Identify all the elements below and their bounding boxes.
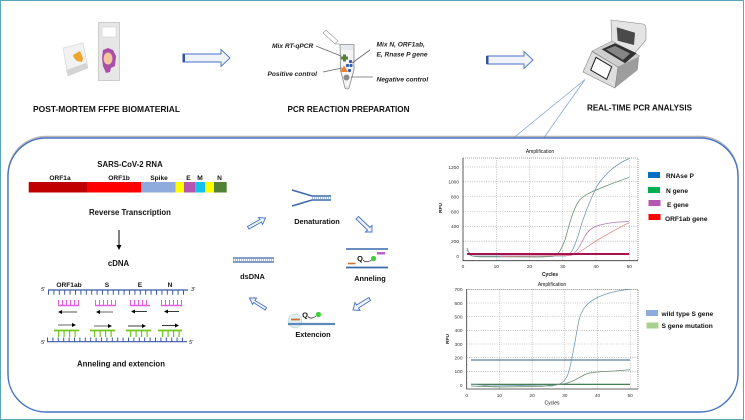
- icon: thermal cycler: [583, 20, 646, 88]
- icon: microscope slide: [98, 22, 120, 80]
- chart title: Amplification: [526, 149, 554, 155]
- dsDNA: dsDNA: [240, 272, 265, 281]
- arrow: reverse transcription to cDNA: [116, 230, 122, 250]
- label: Negative control: [351, 76, 428, 84]
- grid: [463, 158, 638, 261]
- magenta probes: [58, 302, 182, 306]
- label: Positive control: Positive control: [268, 71, 317, 78]
- axis labels: 200: [451, 239, 459, 245]
- icon: reaction tube: [323, 30, 354, 89]
- annealing: [346, 249, 388, 283]
- axis labels: 40: [593, 264, 599, 270]
- legend: four genes: [648, 172, 708, 223]
- axis labels: Cycles: [542, 272, 558, 278]
- axis labels: 0: [460, 383, 463, 389]
- gene labels: [49, 175, 222, 182]
- bottom strand: [47, 340, 187, 342]
- axis labels: 600: [454, 301, 463, 307]
- genome bar: [29, 182, 227, 192]
- axis labels: [438, 165, 632, 278]
- axis labels: 200: [454, 356, 463, 362]
- axis labels: 40: [595, 393, 600, 399]
- arrow: step 1 to step 2: [182, 50, 230, 66]
- denaturation: Denaturation: [294, 217, 340, 226]
- axis labels: 300: [454, 342, 463, 348]
- target labels: ORF1ab: [56, 282, 82, 289]
- target labels: E: [138, 282, 143, 289]
- annealing: Anneling: [354, 274, 386, 283]
- label: Mix N, ORF1ab, E, Rnase P gene: [352, 42, 428, 63]
- heading: PCR reaction preparation: PCR REACTION PREPARATION: [288, 104, 410, 114]
- target labels: 5': [189, 340, 194, 346]
- PCR cycle diagram: [233, 190, 388, 339]
- denaturation: [292, 190, 340, 226]
- axis labels: 600: [451, 210, 459, 216]
- dsDNA: [233, 258, 274, 281]
- axis labels: [445, 287, 633, 406]
- axis labels: RFU: [445, 334, 451, 344]
- axis labels: 30: [560, 264, 566, 270]
- callout lines from cycler to panel: [514, 80, 585, 138]
- green probes: [54, 330, 182, 334]
- arrow: step 2 to step 3: [486, 52, 533, 68]
- top strand: [48, 290, 188, 292]
- legend item: S gene mutation: S gene mutation: [662, 323, 713, 330]
- target labels: N: [168, 282, 173, 289]
- chart title: Amplification: [538, 282, 566, 288]
- panel: detail of RT-qPCR: [8, 136, 738, 412]
- gene labels: M: [197, 175, 203, 182]
- axis labels: 1000: [448, 180, 459, 186]
- axis labels: 10: [497, 393, 502, 399]
- target labels: 5': [41, 287, 46, 293]
- text: Anneling and extencion: Anneling and extencion: [77, 360, 165, 368]
- gene labels: ORF1a: [49, 175, 71, 182]
- legend item: wild type S gene: wild type S gene: [660, 311, 713, 318]
- diagram: annealing and extension: [41, 282, 196, 346]
- arrow: denaturation to annealing: [356, 216, 372, 232]
- axis labels: 400: [454, 328, 463, 334]
- arrow: annealing to extension: [353, 298, 370, 310]
- forward primer arrows: [58, 323, 179, 328]
- gene labels: ORF1b: [108, 175, 130, 182]
- step 2: PCR reaction preparation: [268, 30, 428, 114]
- extension: Extencion: [295, 330, 331, 339]
- heading: post-mortem FFPE biomaterial: POST-MORTEM FFPE BIOMATERIAL: [33, 104, 180, 114]
- annealing: Q: [357, 254, 363, 263]
- gene labels: N: [217, 175, 222, 182]
- axis labels: 800: [451, 194, 459, 200]
- curves: [467, 158, 629, 257]
- target labels: [41, 282, 196, 346]
- axis labels: 20: [529, 393, 535, 399]
- heading: SARS-CoV-2 RNA: SARS-CoV-2 RNA: [97, 160, 163, 169]
- legend item: N gene: N gene: [666, 188, 688, 195]
- extension: [288, 310, 335, 339]
- step 1: post-mortem FFPE biomaterial: [33, 22, 180, 114]
- plot frame: [463, 158, 638, 261]
- chart: amplification, four genes: [438, 149, 638, 278]
- label: Mix N, ORF1ab, E, Rnase P gene: Mix N, ORF1ab,: [376, 42, 425, 48]
- legend: S gene: [646, 310, 713, 330]
- label: Mix RT-qPCR: [272, 43, 341, 56]
- axis labels: 50: [628, 393, 633, 399]
- grid: [467, 289, 638, 389]
- axis labels: 50: [627, 264, 632, 270]
- legend item: ORF1ab gene: ORF1ab gene: [665, 216, 708, 223]
- heading: real-time PCR analysis: REAL-TIME PCR ANALYSIS: [587, 102, 692, 112]
- axis labels: RFU: [438, 203, 444, 213]
- plot frame: [467, 289, 638, 389]
- label: Mix RT-qPCR: Mix RT-qPCR: [272, 43, 314, 50]
- chart: amplification, S gene: [445, 282, 638, 406]
- label: Positive control: [268, 68, 342, 78]
- axis labels: 1200: [448, 165, 459, 171]
- label: Mix N, ORF1ab, E, Rnase P gene: E, Rnase P gene: [376, 52, 428, 58]
- target labels: 3': [191, 287, 196, 293]
- step 3: real-time PCR analysis: [583, 20, 692, 112]
- axis labels: 500: [454, 314, 463, 320]
- text: cDNA: cDNA: [108, 259, 129, 268]
- gene labels: E: [186, 175, 191, 182]
- text: Reverse Transcription: Reverse Transcription: [89, 208, 171, 217]
- axis labels: 400: [451, 224, 459, 230]
- legend item: E gene: E gene: [667, 202, 689, 209]
- target labels: 5': [41, 340, 46, 346]
- axis labels: 0: [465, 393, 468, 399]
- axis labels: 100: [454, 369, 463, 375]
- arrow: dsDNA to denaturation: [248, 218, 266, 229]
- reverse primer arrows: [58, 310, 179, 314]
- target labels: S: [105, 282, 110, 289]
- curves: [471, 289, 630, 387]
- axis labels: 10: [494, 264, 499, 270]
- legend item: RNAse P: RNAse P: [666, 173, 694, 180]
- extension: Q: [302, 310, 308, 320]
- arrow: extension to dsDNA: [250, 298, 266, 310]
- axis labels: 700: [454, 287, 463, 293]
- gene labels: Spike: [150, 175, 168, 182]
- icon: paraffin block: [63, 43, 88, 76]
- label: Negative control: Negative control: [376, 76, 428, 84]
- axis labels: 30: [562, 393, 568, 399]
- axis labels: Cycles: [544, 400, 560, 406]
- axis labels: 0: [456, 254, 459, 260]
- axis labels: 0: [462, 264, 465, 270]
- axis labels: 20: [527, 264, 532, 270]
- genome map: SARS-CoV-2 RNA: [29, 160, 227, 192]
